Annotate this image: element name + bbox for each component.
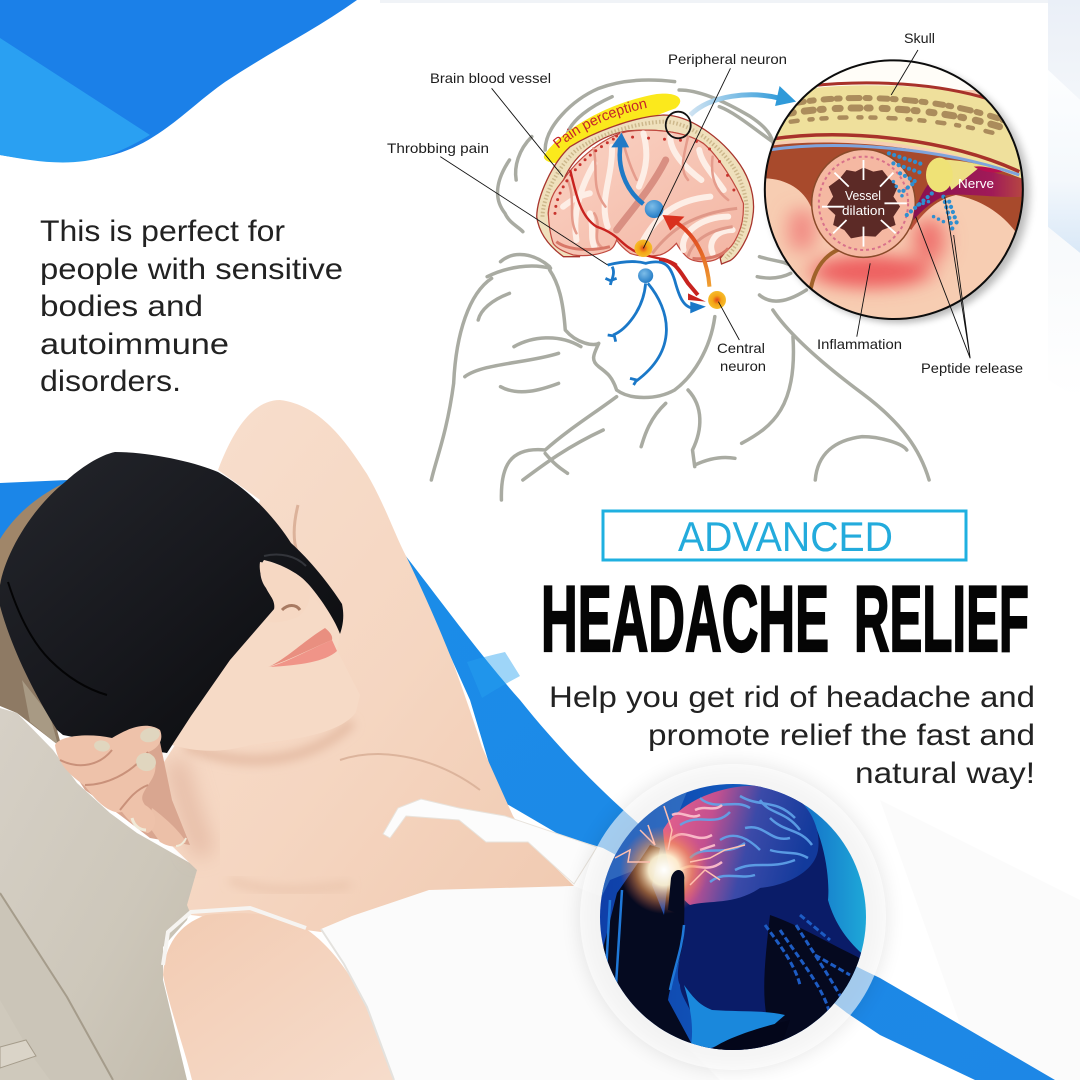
ADVANCED boxed label (603, 511, 966, 560)
gap shade behind neck (322, 722, 342, 795)
lit throat (684, 985, 785, 1050)
peptide dots (889, 153, 958, 233)
headline: headache relief: HEADACHE (541, 566, 829, 671)
pillow (0, 708, 197, 1080)
right text block: promote relief the fast and (648, 719, 1035, 752)
callout leader lines (440, 50, 970, 358)
blue arrow to perception (611, 133, 643, 204)
nose (260, 562, 310, 622)
red blood vessel (570, 170, 706, 302)
diagram labels: Throbbing pain (387, 140, 489, 156)
blue wave band behind woman (0, 480, 1055, 1080)
photo: woman wearing black headache mask (0, 400, 720, 1080)
right text block (549, 681, 1035, 790)
black headband mask (0, 452, 343, 753)
circular inset: x-ray head with glowing brain (600, 784, 875, 1050)
grey line drawing of head (431, 80, 929, 500)
diagram labels: Central (717, 340, 765, 356)
inflammation glow (792, 207, 943, 288)
lightning (615, 806, 745, 885)
ADVANCED boxed label: ADVANCED (678, 513, 893, 560)
neuron balls (634, 200, 726, 309)
pain glow (620, 826, 708, 914)
diagram labels (387, 30, 1023, 376)
left text block: people with sensitive (40, 253, 343, 286)
magnifier circle on skull (666, 112, 691, 138)
scalp and skull (816, 61, 974, 90)
head silhouette (678, 797, 870, 1050)
white tank top (163, 799, 720, 1080)
blue nerve arrowhead (690, 302, 706, 313)
brain (548, 130, 743, 262)
diagram labels: Vessel (845, 188, 881, 203)
left text block: This is perfect for (40, 215, 285, 248)
blue nerve branches (605, 262, 695, 385)
diagram labels: Peptide release (921, 360, 1023, 376)
face (172, 595, 360, 751)
lips (268, 628, 337, 667)
hair (0, 484, 62, 748)
skull band (537, 115, 754, 264)
shoulder (163, 913, 394, 1080)
neck and spine (764, 914, 860, 1040)
neural headache diagram (431, 50, 1029, 500)
diagram labels: Peripheral neuron (668, 51, 787, 67)
diagram labels: Brain blood vessel (430, 70, 551, 86)
hand silhouette (600, 845, 695, 1050)
left text block (40, 215, 343, 398)
vessel stalk (811, 248, 842, 288)
yellow pain highlight (544, 94, 680, 163)
dilated vessel (812, 149, 915, 257)
brain (663, 785, 819, 905)
top-left blue wave (0, 0, 357, 162)
left text block: disorders. (40, 365, 181, 398)
curved label: pain perception: Pain perception (552, 100, 647, 148)
hand (55, 726, 190, 846)
nerve (913, 158, 1025, 220)
dura and brown tissue (766, 142, 1022, 231)
left text block: bodies and (40, 290, 203, 323)
lens: magnified skull and vessel (764, 60, 1029, 323)
right text block: Help you get rid of headache and (549, 681, 1035, 714)
arm, neck and chest skin (157, 400, 574, 932)
diagram labels: Nerve (958, 176, 994, 191)
right text block: natural way! (855, 757, 1035, 790)
red-orange return arrow (663, 215, 709, 287)
diagram labels: Inflammation (817, 336, 902, 352)
arrow to lens (690, 86, 796, 115)
circular inset ring (580, 764, 886, 1070)
diagram labels: dilation (842, 203, 885, 218)
diagram labels: neuron (720, 358, 766, 374)
left text block: autoimmune (40, 328, 229, 361)
diagram labels: Skull (904, 30, 935, 46)
